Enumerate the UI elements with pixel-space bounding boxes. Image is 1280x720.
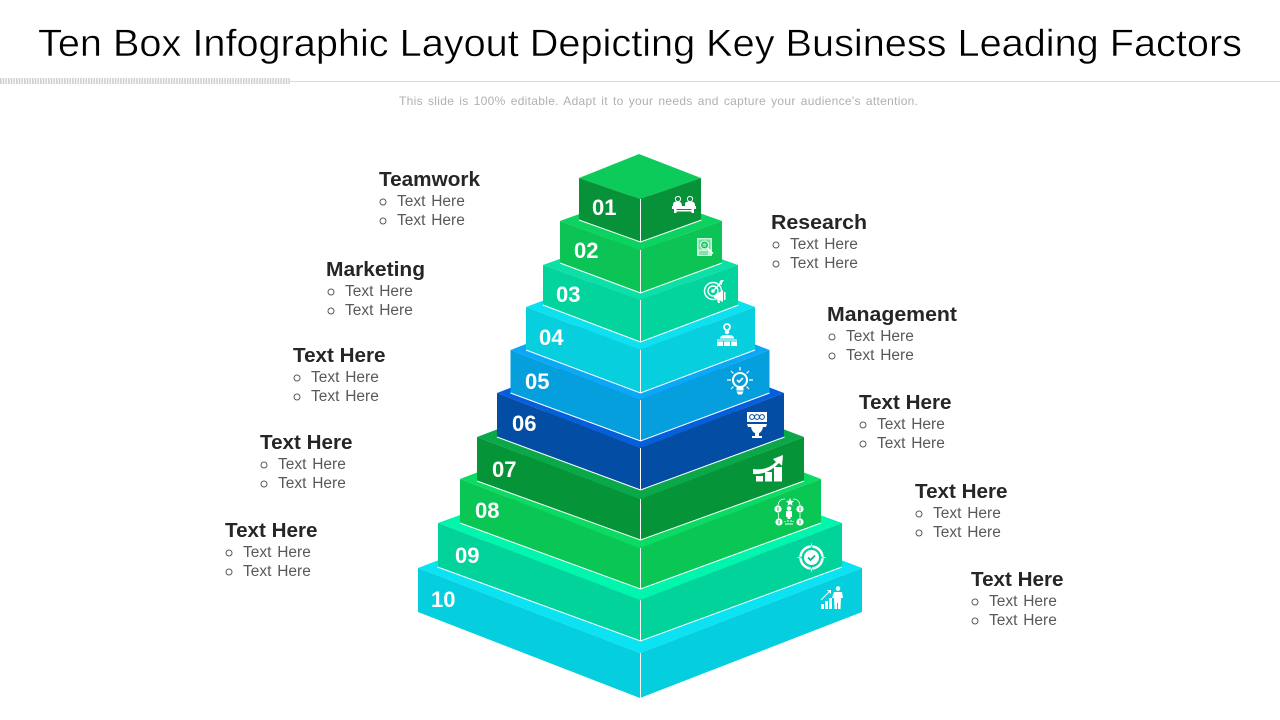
tier 03	[543, 230, 738, 342]
label: left text 3	[293, 344, 386, 405]
label: Research: Research	[771, 211, 867, 234]
label: Marketing: Text Here	[345, 283, 413, 300]
tier 10: 10	[431, 587, 455, 612]
label: Marketing: Marketing	[326, 258, 425, 281]
label: left text 5: Text Here	[225, 519, 318, 542]
icon: light bulb with check	[727, 367, 753, 394]
label: Research	[771, 211, 867, 272]
label: right text 4: Text Here	[915, 480, 1008, 503]
label: left text 3: Text Here	[311, 369, 379, 386]
tier 04	[526, 264, 755, 393]
label: left text 4: Text Here	[278, 456, 346, 473]
icon: team hierarchy	[717, 324, 737, 346]
label: left text 5	[225, 519, 318, 580]
tier 09	[438, 450, 842, 641]
tier 09: 09	[455, 543, 479, 568]
label: Teamwork	[379, 168, 481, 229]
tier 06	[497, 338, 784, 490]
tier 04: 04	[539, 325, 564, 350]
tier 05: 05	[525, 369, 549, 394]
icon: target and megaphone	[704, 280, 726, 303]
label: right text 5: Text Here	[989, 593, 1057, 610]
label: Management: Text Here	[846, 347, 914, 364]
label: Marketing	[326, 258, 425, 319]
label: right text 3: Text Here	[859, 391, 952, 414]
icon: research document	[697, 238, 713, 256]
label: Management: Management	[827, 303, 957, 326]
tier 01: 01	[592, 195, 616, 220]
title: Ten Box Infographic Layout Depicting Key Business Leading Factors	[38, 22, 1242, 64]
label: left text 4: Text Here	[278, 475, 346, 492]
tier 08: 08	[475, 498, 499, 523]
label: right text 4	[915, 480, 1008, 541]
label: Teamwork: Text Here	[397, 193, 465, 210]
icon: target check	[798, 544, 826, 572]
label: right text 5	[971, 568, 1064, 629]
label: Management	[827, 303, 957, 364]
label: left text 4: Text Here	[260, 431, 352, 454]
tier 01	[579, 154, 702, 242]
icon: person with growth chart	[821, 586, 843, 609]
label: right text 3	[859, 391, 952, 452]
label: left text 3: Text Here	[293, 344, 386, 367]
icon: people at desk	[672, 196, 696, 213]
label: left text 5: Text Here	[243, 563, 311, 580]
icon: person with money nodes	[774, 498, 804, 526]
label: Marketing: Text Here	[345, 302, 413, 319]
label: right text 3: Text Here	[877, 435, 945, 452]
label: Teamwork: Teamwork	[379, 168, 481, 191]
label: right text 5: Text Here	[989, 612, 1057, 629]
label: right text 4: Text Here	[933, 524, 1001, 541]
header rule	[0, 78, 1280, 84]
label: Teamwork: Text Here	[397, 212, 465, 229]
label: Research: Text Here	[790, 236, 858, 253]
tier 08	[460, 410, 821, 589]
label: left text 4	[260, 431, 352, 492]
label: left text 5: Text Here	[243, 544, 311, 561]
icon: trophy with banknote	[747, 412, 767, 438]
tier 07	[477, 375, 804, 540]
label: right text 5: Text Here	[971, 568, 1064, 591]
label: right text 3: Text Here	[877, 416, 945, 433]
label: Management: Text Here	[846, 328, 914, 345]
label: left text 3: Text Here	[311, 388, 379, 405]
pyramid	[418, 154, 862, 698]
tier 02: 02	[574, 238, 598, 263]
tier 06: 06	[512, 411, 536, 436]
tier 03: 03	[556, 282, 580, 307]
subtitle: This slide is 100% editable. Adapt it to your needs and capture your audience's attention.	[399, 94, 918, 108]
icon: rising bars with arrow	[753, 455, 783, 482]
label: right text 4: Text Here	[933, 505, 1001, 522]
label: Research: Text Here	[790, 255, 858, 272]
tier 07: 07	[492, 457, 516, 482]
tier 02	[560, 192, 722, 293]
tier 05	[510, 300, 770, 441]
tier 10	[418, 483, 862, 698]
